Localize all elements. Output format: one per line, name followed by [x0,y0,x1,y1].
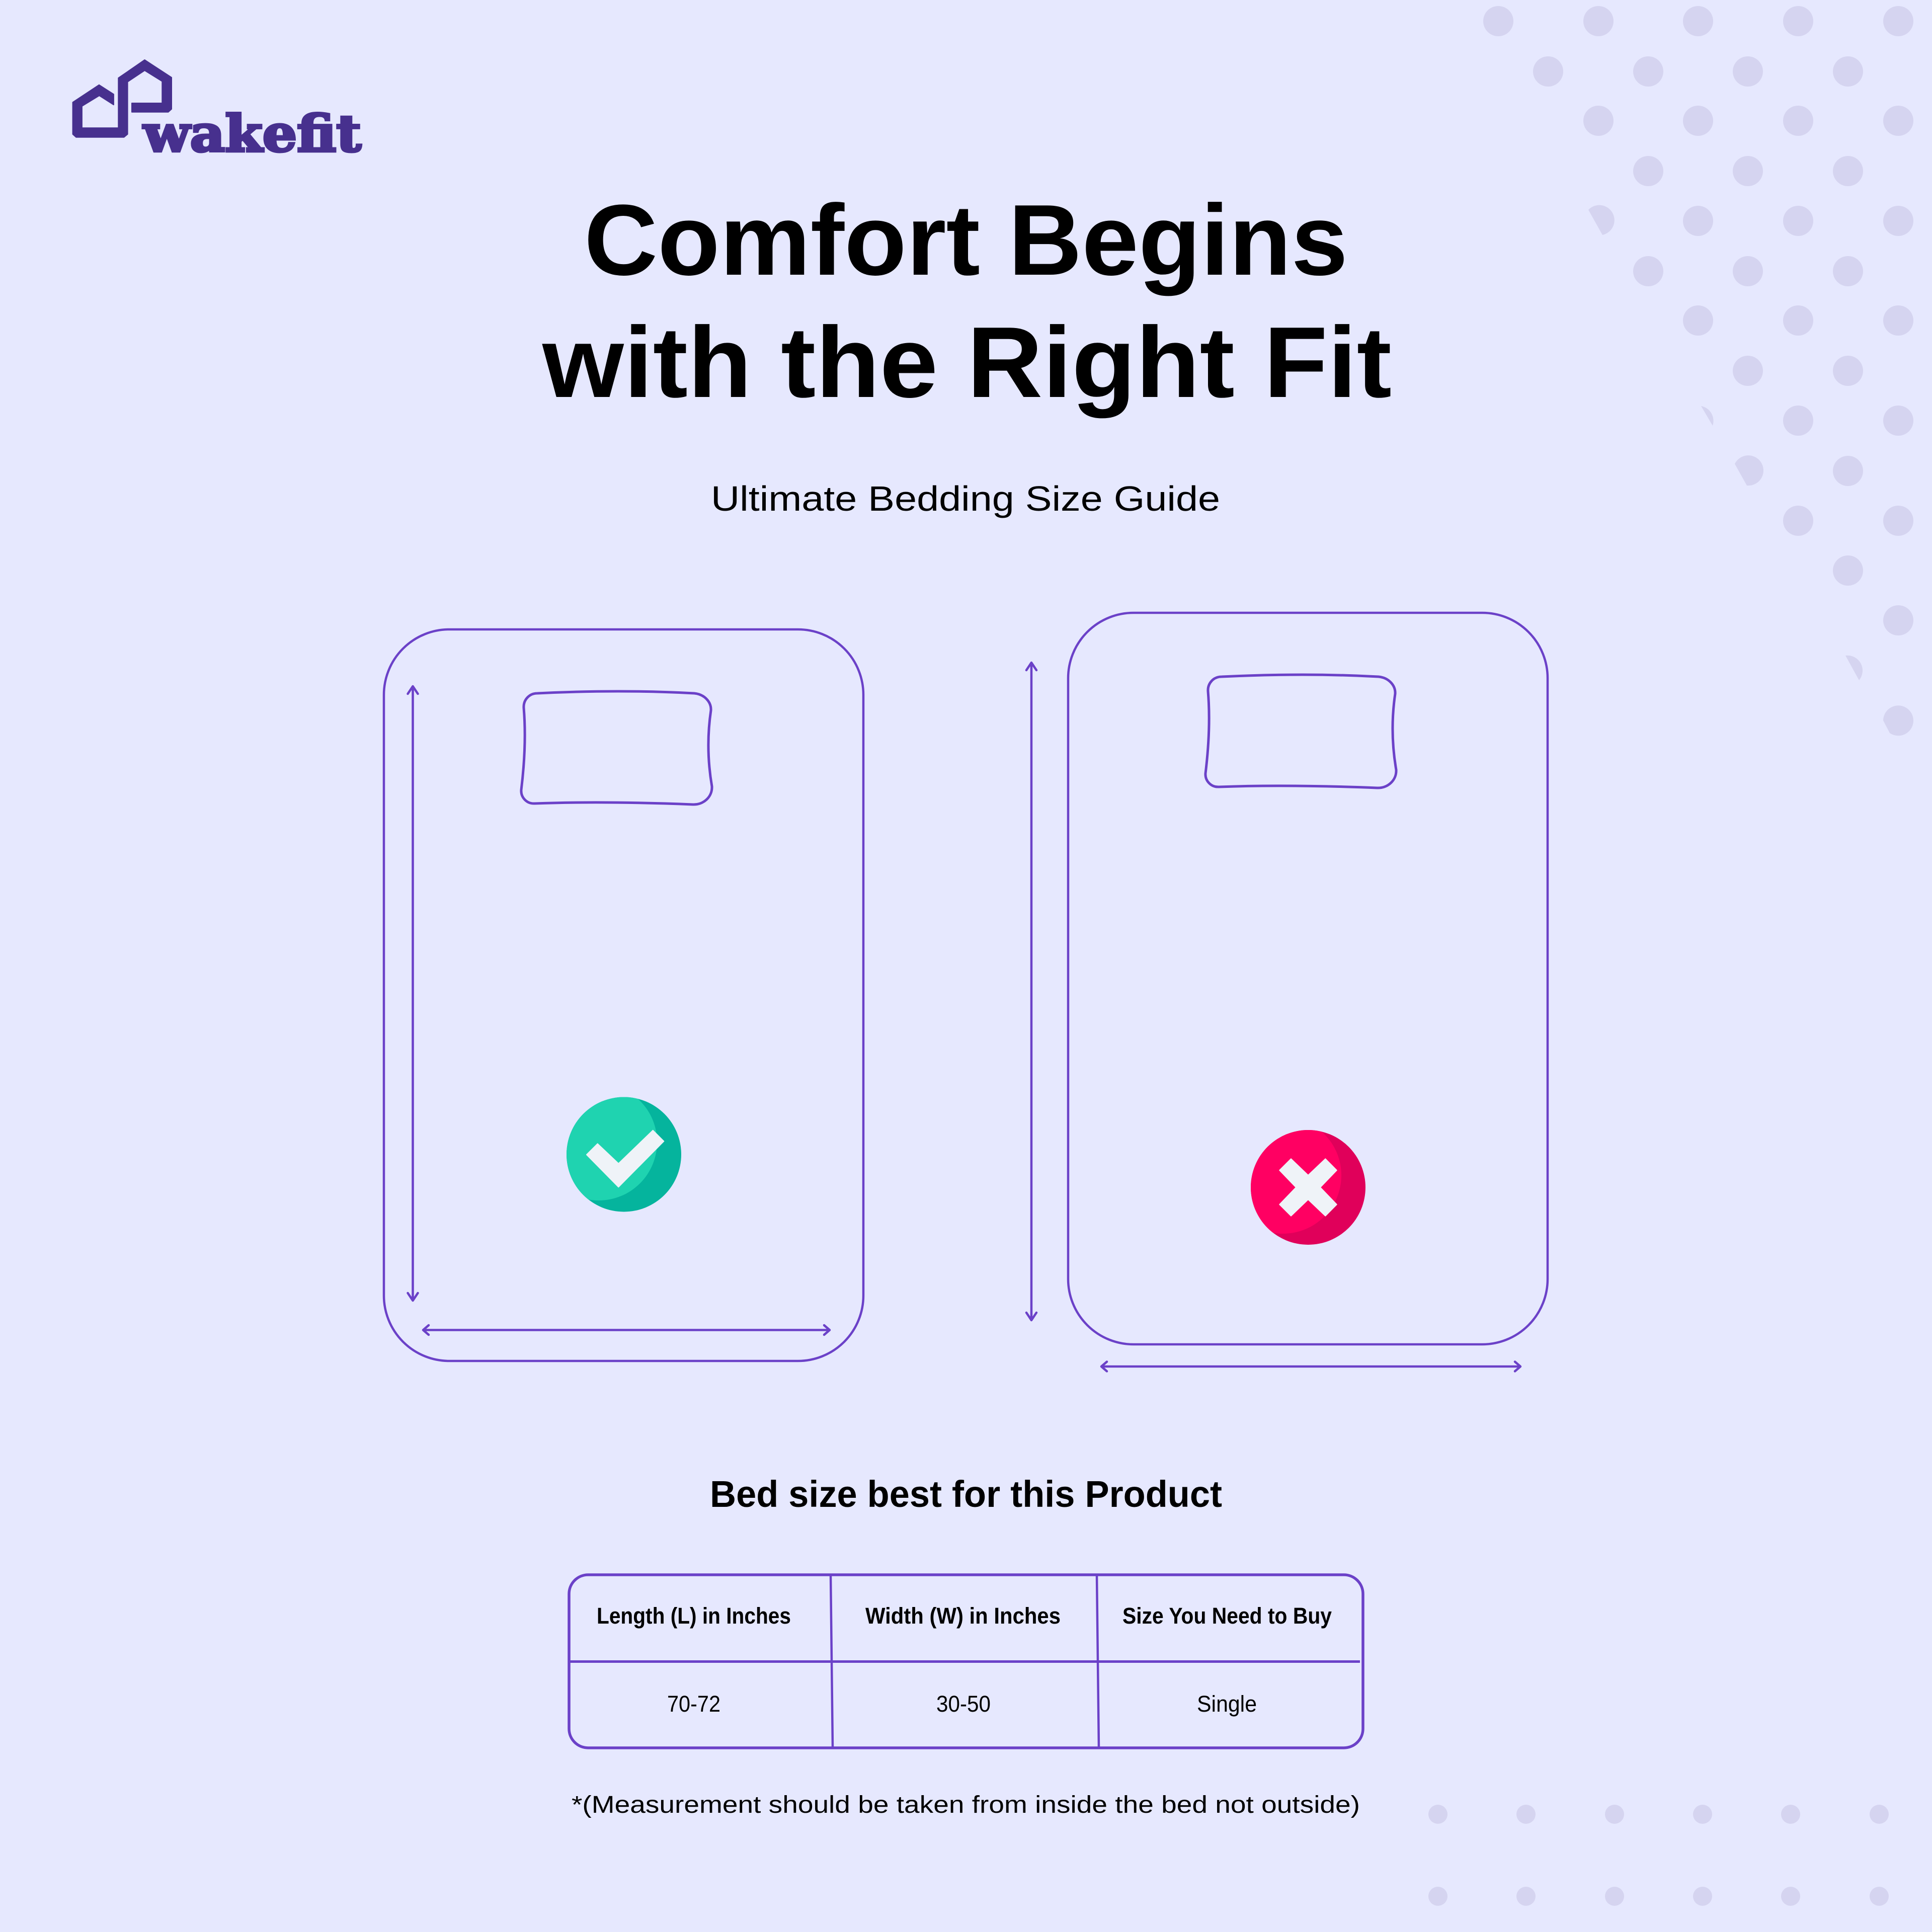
arrow: length [408,686,418,1301]
logo: wakefit [73,60,361,164]
table row: 30-50 [936,1691,991,1717]
section heading: Bed size best for this Product [710,1473,1222,1515]
table row [667,1691,1257,1717]
title [542,184,1392,419]
footnote: *(Measurement should be taken from inside the bed not outside) [572,1792,1360,1818]
dot pattern: bottom right [1428,1805,1889,1906]
icon: green check [567,1097,681,1212]
logo wordmark: wakefit [143,104,361,164]
table header [597,1603,1332,1629]
dot pattern: top right [1483,6,1913,736]
table row: Single [1197,1691,1257,1717]
table row: 70-72 [667,1691,720,1717]
arrow: width [1101,1361,1520,1372]
icon: red cross [1251,1130,1365,1245]
table frame [569,1575,1363,1748]
subtitle: Ultimate Bedding Size Guide [711,479,1220,518]
icon: houses [73,60,172,137]
size table [569,1575,1363,1748]
pillow [521,691,712,804]
arrow: length [1026,663,1036,1320]
bed diagram: wrong fit [1026,613,1548,1372]
table header: Size You Need to Buy [1122,1603,1332,1629]
pillow [1205,675,1396,788]
table header: Length (L) in Inches [597,1603,791,1629]
title: Comfort Begins [584,184,1348,296]
table header: Width (W) in Inches [865,1603,1061,1629]
title: with the Right Fit [542,306,1392,419]
bed diagram: correct fit [384,629,863,1361]
mattress outline [1068,613,1548,1344]
arrow: width [423,1325,830,1335]
mattress outline [384,629,863,1361]
